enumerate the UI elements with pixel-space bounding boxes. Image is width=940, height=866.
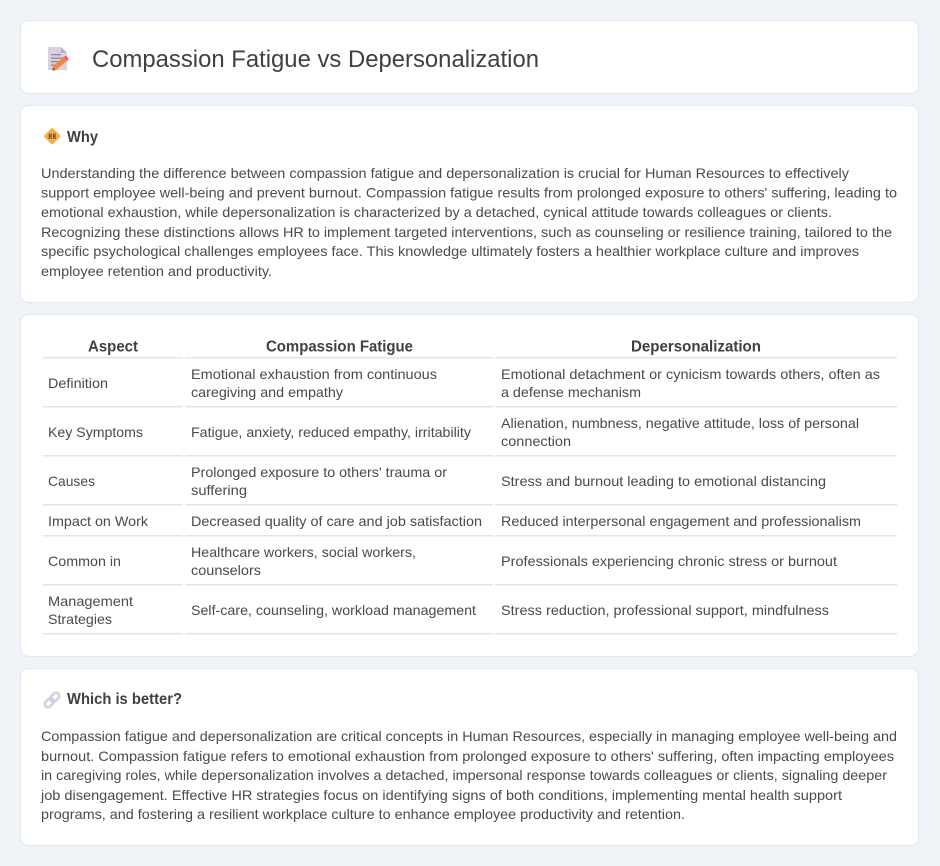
icon: warning diamond — [43, 127, 61, 145]
title: Compassion Fatigue vs Depersonalization — [92, 46, 539, 73]
table row: causes: Prolonged exposure to others' trauma or — [191, 464, 447, 480]
table row: common in — [43, 544, 897, 586]
table row: management strategies: Self-care, counseling, workload management — [191, 602, 476, 618]
panel: why — [20, 106, 918, 302]
text block: why paragraph: Understanding the difference between compassion fatigue and depersonalization is crucial for Human Resources to effectively — [41, 165, 849, 181]
table header row: Depersonalization — [631, 338, 761, 356]
table row: key symptoms: Alienation, numbness, negative attitude, loss of personal — [501, 415, 859, 431]
table row: causes: Causes — [48, 473, 95, 489]
icon: link — [43, 691, 61, 709]
table row: impact on work — [43, 513, 897, 536]
table row: causes — [43, 464, 897, 506]
table row: causes: suffering — [191, 482, 247, 498]
table header row: Compassion Fatigue — [266, 338, 413, 356]
table row: management strategies — [43, 593, 897, 634]
panel: which is better — [20, 668, 918, 846]
heading: which is better: Which is better? — [67, 691, 182, 708]
text block: which is better paragraph: Compassion fatigue and depersonalization are critical concepts in Human Resources, especially in managing employee well-being and — [41, 728, 897, 744]
table row: common in: Healthcare workers, social workers, — [191, 544, 416, 560]
text block: which is better paragraph: burnout. Compassion fatigue refers to emotional exhaustion from prolonged exposure to others' suffering, often impacting employees — [41, 748, 894, 764]
table row: definition — [43, 366, 897, 408]
icon: memo with pencil — [48, 47, 69, 70]
table row: definition: Emotional detachment or cynicism towards others, often as — [501, 366, 880, 382]
table row: management strategies: Stress reduction, professional support, mindfulness — [501, 602, 829, 618]
table row: key symptoms — [43, 415, 897, 456]
table row: impact on work: Reduced interpersonal engagement and professionalism — [501, 513, 861, 529]
text block: why paragraph: emotional exhaustion, while depersonalization is characterized by a detached, cynical attitude towards colleagues or clients. — [41, 204, 832, 220]
table row: common in: Professionals experiencing chronic stress or burnout — [501, 553, 837, 569]
table row: key symptoms: Key Symptoms — [48, 424, 143, 440]
table row: impact on work: Decreased quality of care and job satisfaction — [191, 513, 482, 529]
text block: which is better paragraph — [40, 728, 897, 822]
table row: management strategies: Management — [48, 593, 133, 609]
text block: which is better paragraph: programs, and fostering a resilient workplace culture to enhance employee productivity and retention. — [41, 806, 685, 822]
table row: causes: Stress and burnout leading to emotional distancing — [501, 473, 826, 489]
text block: why paragraph: Recognizing these distinctions allows HR to implement targeted interventions, such as counseling or resilience training, tailored to the — [41, 224, 892, 240]
text block: why paragraph — [41, 165, 897, 279]
table row: common in: Common in — [48, 553, 121, 569]
table row: impact on work: Impact on Work — [48, 513, 149, 529]
table row: definition: caregiving and empathy — [191, 384, 343, 400]
table row: common in: counselors — [191, 562, 261, 578]
table header row: Aspect — [88, 338, 139, 356]
text block: why paragraph: specific psychological challenges employees face. This knowledge ultimately fosters a healthier workplace culture and improves — [41, 243, 859, 259]
text block: why paragraph: support employee well-being and prevent burnout. Compassion fatigue results from prolonged exposure to others' suffering, leading to — [41, 184, 897, 200]
text block: which is better paragraph: in caregiving roles, while depersonalization involves a detached, impersonal response towards colleagues or clients, signaling deeper — [41, 767, 887, 783]
table row: management strategies: Strategies — [48, 611, 112, 627]
table row: definition: Emotional exhaustion from continuous — [191, 366, 437, 382]
text block: why paragraph: employee retention and productivity. — [41, 263, 272, 279]
table header row — [43, 338, 897, 358]
panel: header — [20, 20, 918, 94]
table row: key symptoms: Fatigue, anxiety, reduced empathy, irritability — [191, 424, 471, 440]
text block: which is better paragraph: job disengagement. Effective HR strategies focus on identifying signs of both conditions, implementing mental health support — [40, 787, 842, 803]
table row: key symptoms: connection — [501, 433, 571, 449]
panel: comparison table — [20, 314, 918, 656]
table row: definition: Definition — [48, 375, 108, 391]
heading: why: Why — [67, 129, 98, 146]
table row: definition: a defense mechanism — [501, 384, 641, 400]
